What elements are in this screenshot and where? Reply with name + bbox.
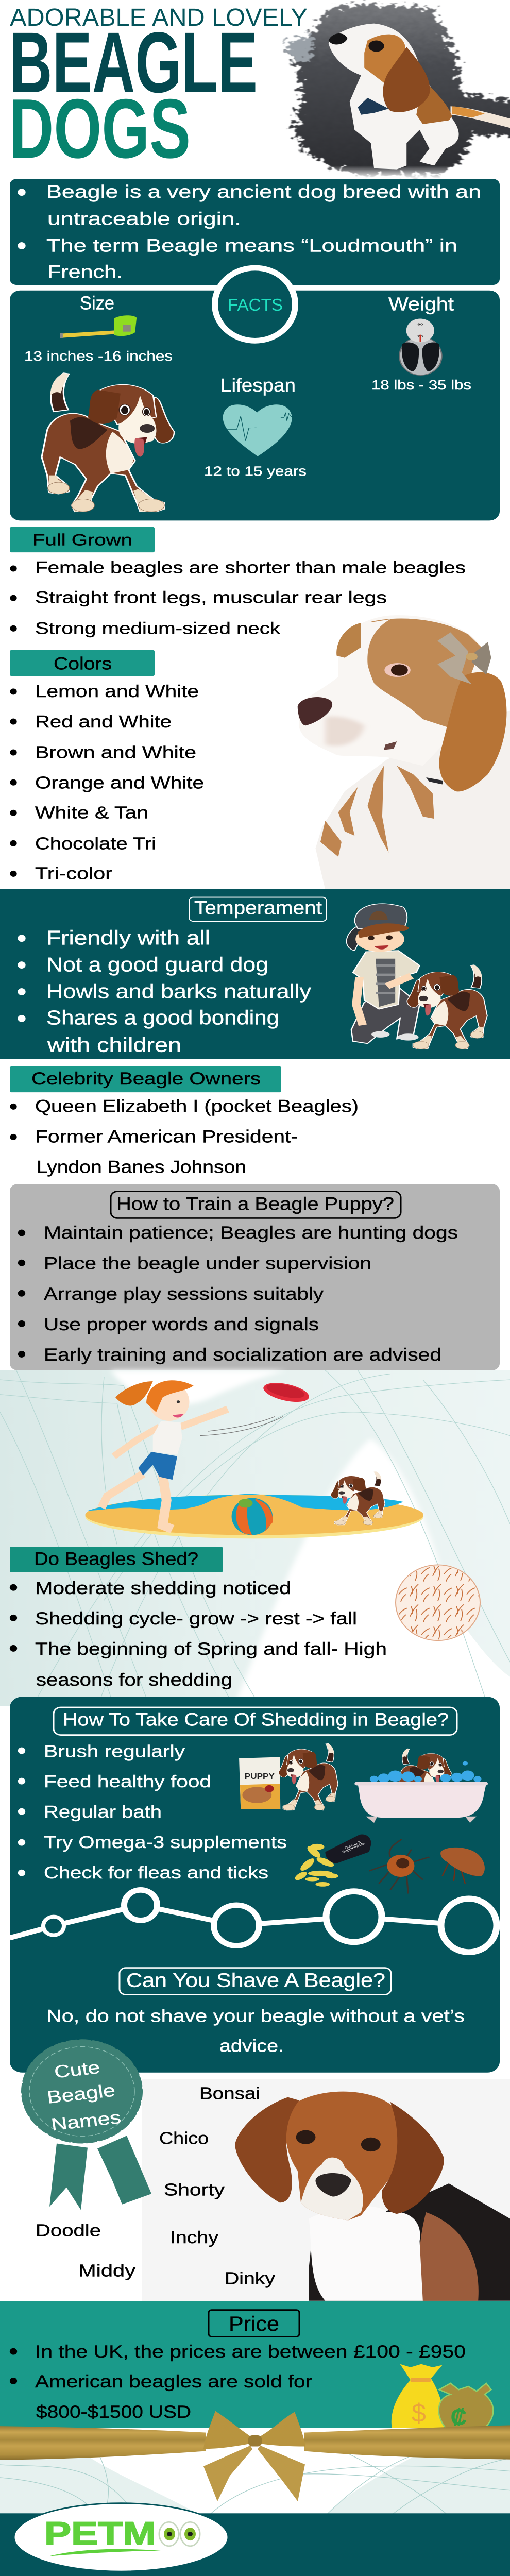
facts circle bbox=[215, 268, 295, 341]
icon: omega-3 bottle and pills bbox=[293, 1835, 371, 1887]
lifespan label: Lifespan bbox=[220, 376, 296, 396]
beach ball bbox=[232, 1498, 273, 1535]
text: dog names: Dinky bbox=[225, 2269, 275, 2288]
photo: beagle with bow bbox=[298, 615, 510, 890]
icon: omega-3 bottle and pills: Omega-3 bbox=[344, 1840, 362, 1850]
price list: In the UK, the prices are between £100 - £950 bbox=[35, 2342, 466, 2361]
badge text: Beagle bbox=[46, 2080, 116, 2107]
logo oval bbox=[14, 2503, 228, 2571]
temperament list bbox=[18, 927, 312, 1056]
heading: temperament: Temperament bbox=[194, 898, 322, 919]
frisbee bbox=[261, 1379, 311, 1405]
list: shedding: seasons for shedding bbox=[36, 1670, 232, 1689]
training list: Early training and socialization are advised bbox=[44, 1345, 441, 1364]
heading: celebrity owners bbox=[10, 1066, 281, 1092]
illustration: watercolor beagle bbox=[286, 5, 510, 179]
ribbon band bbox=[0, 2425, 510, 2460]
text: dog names: Inchy bbox=[170, 2228, 218, 2247]
photo: tricolor beagle bbox=[142, 2079, 510, 2301]
heading: can you shave: Can You Shave A Beagle? bbox=[126, 1970, 385, 1991]
text: dog names: Middy bbox=[78, 2261, 136, 2280]
shave answer: No, do not shave your beagle without a vet’s bbox=[46, 2006, 465, 2026]
beach bbox=[85, 1494, 423, 1538]
subtitle: ADORABLE AND LOVELY bbox=[10, 4, 308, 31]
icon: flea bbox=[440, 1848, 485, 1884]
motion lines bbox=[200, 1416, 283, 1436]
icon: money bags: $ bbox=[412, 2399, 426, 2427]
list: shedding: The beginning of Spring and fall- High bbox=[35, 1639, 387, 1658]
icon: money bags: ₡ bbox=[450, 2405, 467, 2430]
logo eyes bbox=[159, 2522, 200, 2546]
footer logo: petmoo bbox=[14, 2503, 228, 2571]
icon: puppy food bag bbox=[239, 1757, 280, 1809]
heading: colors: Colors bbox=[54, 653, 112, 673]
list: shedding care: Check for fleas and ticks bbox=[44, 1863, 268, 1883]
heading: celebrity owners: Celebrity Beagle Owners bbox=[31, 1069, 261, 1088]
price list: American beagles are sold for bbox=[35, 2371, 312, 2392]
header: title bbox=[9, 4, 308, 176]
list: full grown: Straight front legs, muscular rear legs bbox=[35, 588, 387, 607]
intro bullets bbox=[18, 189, 26, 249]
weight value: 18 lbs - 35 lbs bbox=[371, 378, 471, 393]
list: colors: Tri-color bbox=[35, 864, 112, 883]
list: full grown bbox=[10, 558, 466, 638]
timeline line with circles bbox=[10, 1890, 497, 1952]
icon: tick bbox=[369, 1839, 429, 1894]
icon: bathtub bbox=[354, 1761, 488, 1823]
lifespan value: 12 to 15 years bbox=[204, 464, 307, 479]
heading: shedding care bbox=[54, 1707, 457, 1735]
icon: money bags bbox=[392, 2364, 493, 2430]
intro text: The term Beagle means “Loudmouth” in bbox=[46, 236, 457, 256]
size label: Size bbox=[80, 293, 114, 314]
weight label: Weight bbox=[388, 294, 454, 315]
list: celebrity owners bbox=[10, 1096, 359, 1177]
temperament list: with children bbox=[47, 1033, 181, 1056]
icon: weighing scale bbox=[399, 319, 441, 375]
illustration: boy bbox=[347, 904, 420, 1043]
heading: shedding care: How To Take Care Of Shedding in Beagle? bbox=[63, 1710, 449, 1730]
badge inner line bbox=[29, 2047, 134, 2136]
training list: Place the beagle under supervision bbox=[44, 1253, 371, 1273]
intro text: French. bbox=[47, 262, 123, 282]
ribbon with bow bbox=[0, 2411, 510, 2501]
intro text: untraceable origin. bbox=[47, 209, 241, 229]
price list bbox=[10, 2342, 466, 2422]
list: colors: Lemon and White bbox=[35, 682, 199, 701]
temperament list: Friendly with all bbox=[46, 927, 210, 949]
size value: 13 inches -16 inches bbox=[24, 348, 173, 363]
intro text bbox=[46, 182, 481, 282]
icon: weighing scale: 70 bbox=[417, 335, 423, 338]
list: colors: Red and White bbox=[35, 713, 172, 732]
list: colors: Orange and White bbox=[35, 773, 204, 792]
title word: dogs: DOGS bbox=[9, 81, 191, 176]
heading: full grown bbox=[10, 527, 155, 552]
training list: Use proper words and signals bbox=[44, 1314, 319, 1334]
icon: fur circle bbox=[396, 1565, 480, 1640]
badge text: Cute bbox=[53, 2057, 101, 2082]
heading: colors bbox=[10, 650, 155, 676]
icon: puppy food bag: PUPPY bbox=[245, 1772, 275, 1781]
background: lower swirl pattern bbox=[0, 2452, 510, 2516]
temperament list: Shares a good bonding bbox=[46, 1007, 279, 1029]
list: celebrity owners: Queen Elizabeth I (pocket Beagles) bbox=[35, 1096, 359, 1116]
badge: cute beagle names bbox=[25, 2043, 151, 2210]
heading: price: Price bbox=[229, 2312, 279, 2335]
panel: intro bbox=[10, 179, 500, 285]
panel: price bbox=[0, 2301, 510, 2430]
text: dog names: Shorty bbox=[164, 2180, 225, 2199]
text: dog names: Doodle bbox=[36, 2221, 101, 2240]
facts heading: FACTS bbox=[228, 296, 283, 315]
list: celebrity owners: Former American President- bbox=[35, 1127, 298, 1146]
shave answer bbox=[46, 2006, 465, 2056]
icon: dog with food bbox=[279, 1743, 338, 1810]
text: dog names: Chico bbox=[159, 2129, 209, 2148]
list: shedding care: Feed healthy food bbox=[44, 1772, 211, 1791]
title word: beagle: BEAGLE bbox=[9, 14, 258, 111]
bow tails bbox=[203, 2446, 305, 2501]
list: full grown: Strong medium-sized neck bbox=[35, 619, 281, 638]
badge seal bbox=[25, 2043, 139, 2140]
list: colors: Brown and White bbox=[35, 743, 196, 762]
training list: Maintain patience; Beagles are hunting dogs bbox=[44, 1223, 458, 1242]
list: shedding care: Regular bath bbox=[44, 1803, 162, 1821]
training list bbox=[18, 1223, 458, 1364]
list: shedding care: Try Omega-3 supplements bbox=[44, 1833, 287, 1852]
temperament list: Not a good guard dog bbox=[46, 954, 268, 976]
badge text bbox=[46, 2057, 122, 2134]
list: full grown: Female beagles are shorter than male beagles bbox=[35, 558, 466, 577]
heading: training bbox=[111, 1192, 401, 1218]
list: shedding: Shedding cycle- grow -> rest -> fall bbox=[35, 1608, 357, 1628]
heading: full grown: Full Grown bbox=[32, 531, 132, 549]
list: colors: White & Tan bbox=[35, 803, 148, 822]
list: celebrity owners: Lyndon Banes Johnson bbox=[37, 1157, 246, 1177]
shave answer: advice. bbox=[219, 2036, 284, 2056]
background: swirl pattern bbox=[0, 1370, 510, 1706]
heading: do beagles shed bbox=[10, 1547, 223, 1572]
icon: cartoon beagle bbox=[42, 373, 174, 512]
icon: omega-3 bottle and pills: Supplements bbox=[341, 1841, 366, 1854]
icon: heart bbox=[223, 404, 292, 456]
heading: price bbox=[209, 2310, 299, 2337]
logo text: PETM bbox=[44, 2516, 156, 2552]
list: shedding care: Brush regularly bbox=[44, 1742, 185, 1761]
heading: training: How to Train a Beagle Puppy? bbox=[116, 1194, 394, 1214]
bow knot bbox=[248, 2435, 262, 2447]
girl bbox=[101, 1380, 228, 1529]
bow loops bbox=[203, 2411, 305, 2449]
badge ribbons bbox=[49, 2136, 151, 2210]
temperament list: Howls and barks naturally bbox=[46, 980, 312, 1003]
panel: temperament bbox=[0, 889, 510, 1059]
illustration: puppy bbox=[407, 965, 487, 1049]
list: shedding: Moderate shedding noticed bbox=[35, 1578, 291, 1598]
illustration: dog on the beach bbox=[331, 1471, 385, 1525]
icon: dog in bath bbox=[399, 1749, 451, 1806]
illustration: girl throwing frisbee on the beach bbox=[85, 1379, 423, 1538]
icon: weighing scale: 90 bbox=[417, 323, 423, 326]
text: dog names: Bonsai bbox=[199, 2084, 260, 2103]
panel: shedding care bbox=[10, 1697, 500, 2073]
list: colors: Chocolate Tri bbox=[35, 834, 156, 853]
list: shedding bbox=[10, 1578, 387, 1689]
footer band bbox=[0, 2513, 510, 2576]
heading: do beagles shed: Do Beagles Shed? bbox=[34, 1549, 198, 1569]
list: shedding care bbox=[18, 1742, 287, 1883]
training list: Arrange play sessions suitably bbox=[44, 1284, 324, 1303]
intro text: Beagle is a very ancient dog breed with an bbox=[46, 182, 481, 201]
text: dog names bbox=[36, 2084, 275, 2288]
panel: facts bbox=[10, 268, 500, 520]
panel: training bbox=[10, 1184, 500, 1370]
badge text: Names bbox=[50, 2107, 122, 2134]
icon: tape measure bbox=[60, 315, 137, 338]
price list: $800-$1500 USD bbox=[36, 2402, 191, 2422]
list: colors bbox=[10, 682, 204, 883]
logo swoosh bbox=[49, 2549, 161, 2556]
